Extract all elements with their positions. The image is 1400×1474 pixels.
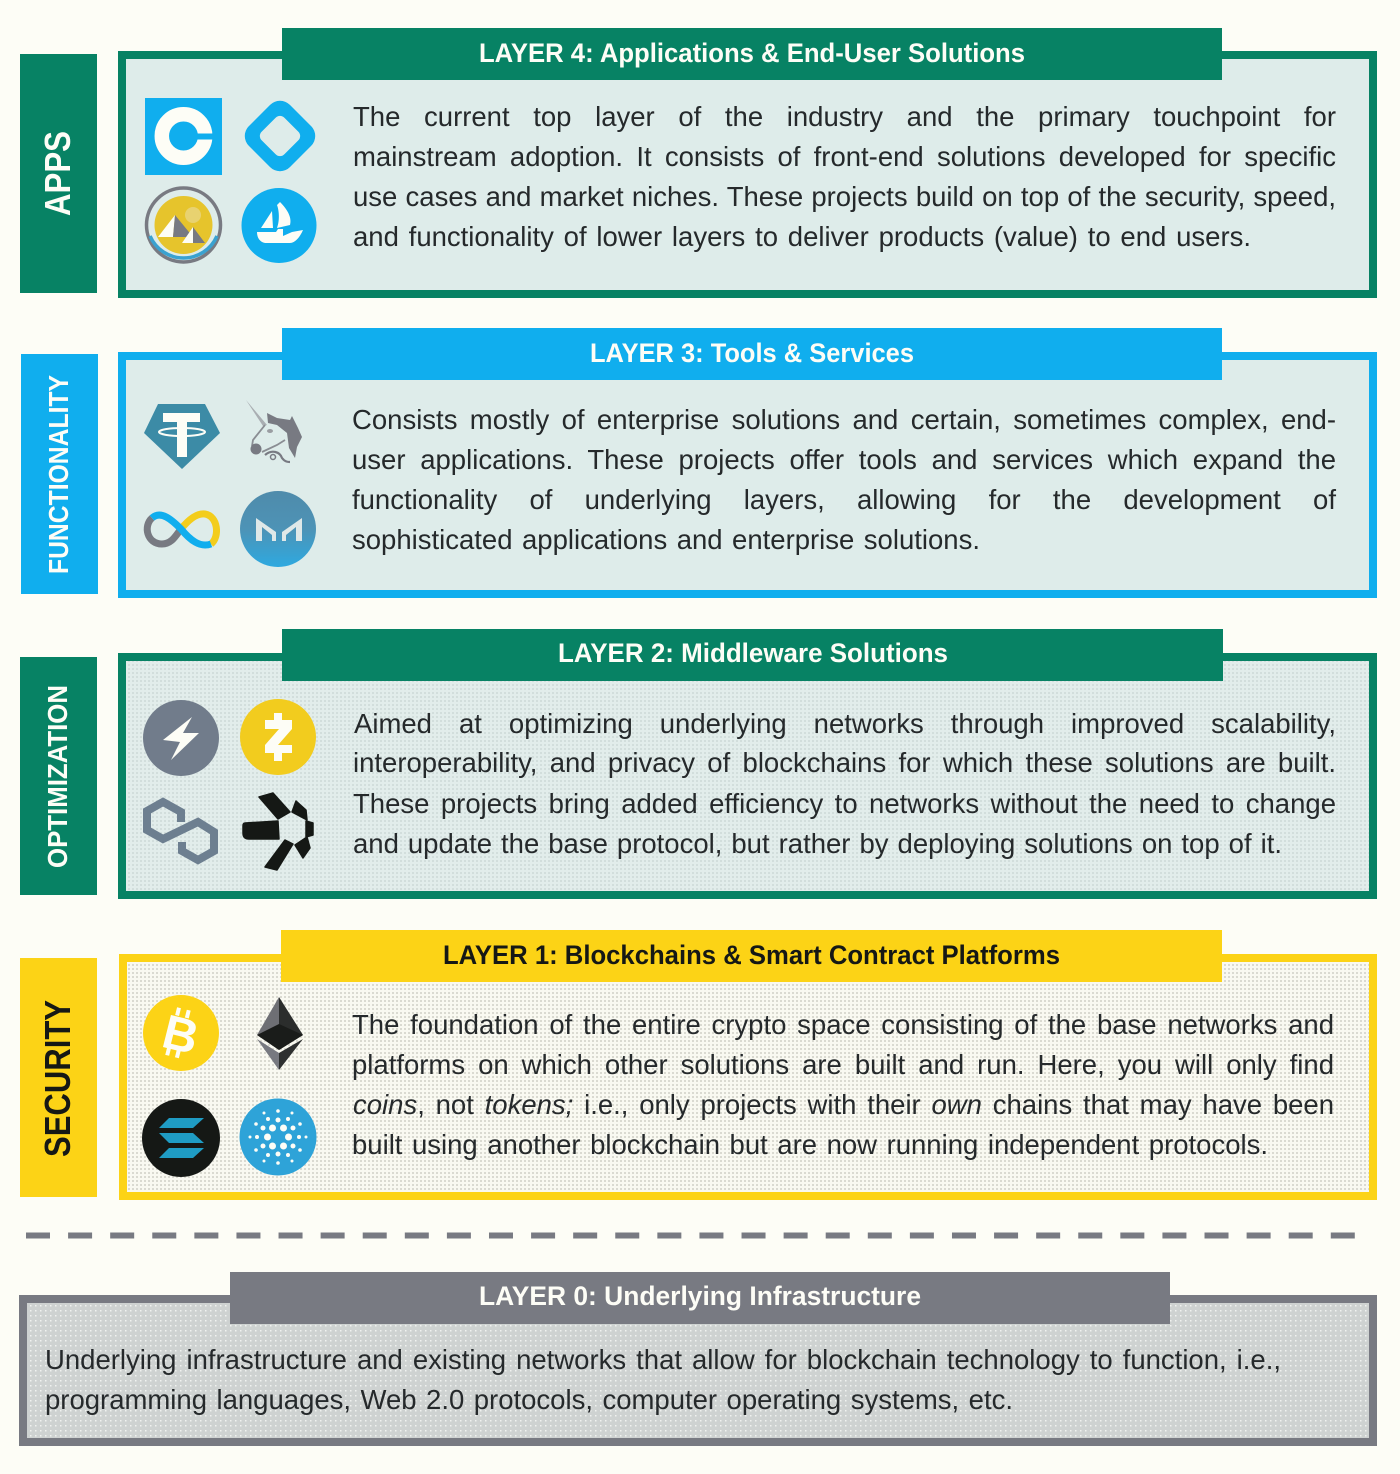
icon: quant xyxy=(243,793,313,870)
header bar xyxy=(281,930,1222,982)
body text xyxy=(45,1344,1281,1415)
header bar xyxy=(282,28,1222,80)
icon: chainlink infinity xyxy=(147,514,217,545)
icon: uniswap xyxy=(246,400,302,462)
side tab: FUNCTIONALITY: FUNCTIONALITY xyxy=(43,375,74,574)
panel: layer 1 blockchains: platforms on which other solutions are built and run. Here, you will only find xyxy=(352,1049,1334,1080)
body text xyxy=(353,708,1336,859)
dashed separator xyxy=(26,1232,1355,1238)
panel: layer 2 middleware: Aimed at optimizing underlying networks through improved scalability, xyxy=(354,708,1336,739)
icon: tether xyxy=(144,404,220,469)
header bar xyxy=(282,328,1222,380)
header bar: LAYER 3: Tools & Services xyxy=(590,338,914,368)
panel box xyxy=(122,657,1373,895)
panel box xyxy=(122,55,1373,294)
panel: layer 1 blockchains xyxy=(20,930,1377,1200)
icon: coinbase xyxy=(145,98,222,175)
icon: cardano xyxy=(240,1098,316,1176)
header bar: LAYER 1: Blockchains & Smart Contract Platforms xyxy=(443,940,1060,970)
panel: layer 3 tools and services: Consists mostly of enterprise solutions and certain, sometimes complex, end- xyxy=(352,404,1336,435)
panel: layer 4 applications: and functionality of lower layers to deliver products (value) to end users. xyxy=(353,221,1251,252)
panel: layer 2 middleware: These projects bring added efficiency to networks without the need to change xyxy=(353,788,1336,819)
panel: layer 1 blockchains: built using another blockchain but are now running independent protocols. xyxy=(352,1129,1268,1160)
panel: layer 1 blockchains: coins, not tokens; i.e., only projects with their own chains that may have been xyxy=(353,1089,1334,1120)
panel: layer 3 tools and services: functionality of underlying layers, allowing for the development of xyxy=(352,484,1336,515)
side tab: OPTIMIZATION xyxy=(20,657,97,895)
panel: layer 1 blockchains: The foundation of the entire crypto space consisting of the base networks and xyxy=(352,1009,1334,1040)
icon: zcash xyxy=(240,699,316,775)
side tab: SECURITY xyxy=(20,958,97,1197)
body text xyxy=(353,101,1336,252)
icon: maker xyxy=(240,491,316,567)
header bar xyxy=(282,629,1223,681)
icon: solana xyxy=(142,1099,220,1177)
panel box xyxy=(123,958,1373,1196)
panel: layer 4 applications: use cases and market niches. These projects build on top of the security, speed, xyxy=(353,181,1336,212)
panel box xyxy=(23,1299,1373,1442)
header bar: LAYER 2: Middleware Solutions xyxy=(558,638,948,668)
icon: lightning xyxy=(143,700,219,776)
panel box xyxy=(122,356,1373,594)
side tab: FUNCTIONALITY xyxy=(21,354,98,594)
panel: layer 2 middleware: interoperability, and privacy of blockchains for which these solutions are built. xyxy=(353,747,1336,778)
icon: ethereum xyxy=(257,997,303,1070)
panel: layer 4 applications: mainstream adoption. It consists of front-end solutions developed for specific xyxy=(353,141,1336,172)
header bar xyxy=(230,1272,1170,1324)
side tab: APPS xyxy=(20,54,97,293)
panel: layer 3 tools and services: sophisticated applications and enterprise solutions. xyxy=(352,524,980,555)
icon: diamond xyxy=(239,95,321,177)
body text xyxy=(352,404,1336,555)
icon: bitcoin: B xyxy=(157,1006,204,1065)
panel: layer 2 middleware: and update the base protocol, but rather by deploying solutions on top of it. xyxy=(353,828,1282,859)
panel: layer 0 infrastructure: Underlying infrastructure and existing networks that allow for blockchain technology to function, i.e., xyxy=(45,1344,1281,1375)
panel: layer 4 applications: The current top layer of the industry and the primary touchpoint for xyxy=(353,101,1336,132)
icon: mountain coin xyxy=(146,188,220,262)
panel: layer 2 middleware xyxy=(20,629,1377,899)
icon: polygon xyxy=(147,802,214,860)
panel: layer 3 tools and services: user applications. These projects offer tools and services which expand the xyxy=(352,444,1336,475)
header bar: LAYER 0: Underlying Infrastructure xyxy=(479,1281,921,1311)
body text xyxy=(352,1009,1334,1160)
header bar: LAYER 4: Applications & End-User Solutions xyxy=(479,38,1025,68)
panel: layer 4 applications xyxy=(20,28,1377,298)
icon: opensea xyxy=(242,188,316,263)
panel: layer 0 infrastructure xyxy=(19,1272,1377,1446)
side tab: SECURITY: SECURITY xyxy=(37,1000,78,1157)
icon: bitcoin xyxy=(143,995,219,1071)
side tab: OPTIMIZATION: OPTIMIZATION xyxy=(42,685,73,868)
panel: layer 0 infrastructure: programming languages, Web 2.0 protocols, computer operating systems, etc. xyxy=(45,1384,1013,1415)
side tab: APPS: APPS xyxy=(37,131,78,216)
panel: layer 3 tools and services xyxy=(21,328,1377,598)
